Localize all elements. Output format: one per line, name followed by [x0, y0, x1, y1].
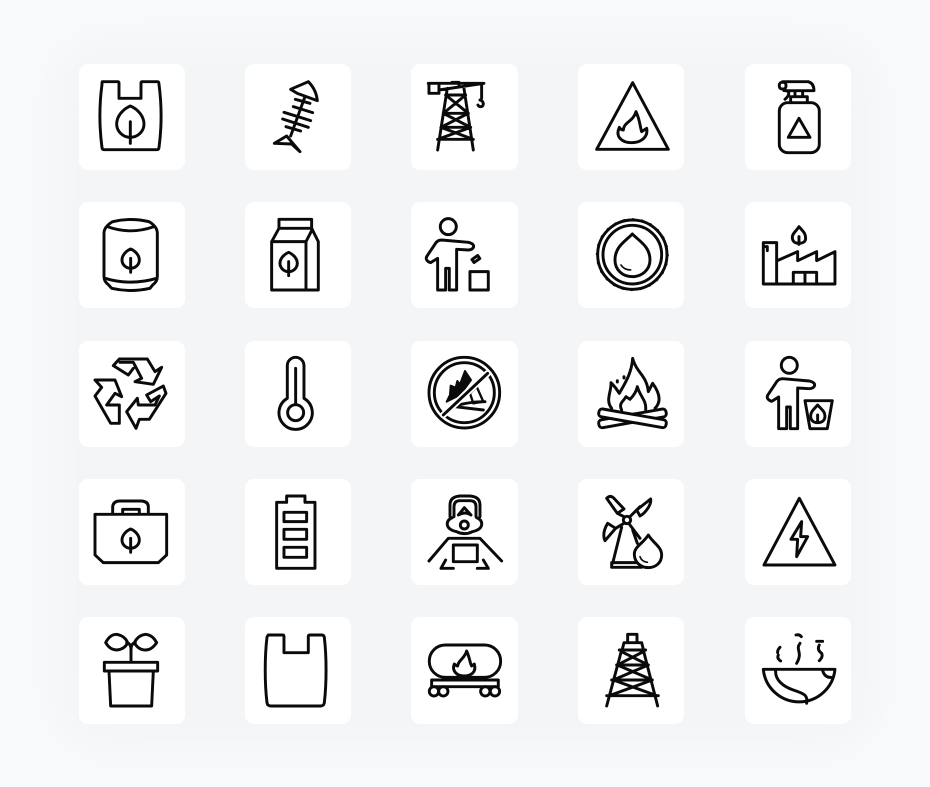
icon: recycle arrows: [79, 341, 185, 447]
icon: thermometer: [245, 341, 351, 447]
icon: fuel tank wagon: [411, 617, 518, 724]
icon: spray bottle: [745, 64, 851, 170]
icon: oil derrick: [578, 617, 684, 724]
icon: person using eco bin: [745, 341, 851, 447]
icon: windmill with drop: [578, 479, 684, 585]
icon: gas mask worker: [411, 479, 518, 585]
icon: battery: [245, 479, 351, 585]
icon: high voltage triangle: [745, 479, 851, 585]
icon: flammable warning triangle: [578, 64, 684, 170]
icon: plain plastic bag: [245, 617, 351, 724]
icon: fish bone: [245, 64, 351, 170]
icon: no fire sign: [411, 341, 518, 447]
icon: sprout in pot: [79, 617, 185, 724]
icon: eco tool bag: [79, 479, 185, 585]
icon: factory with flame: [745, 202, 851, 308]
icon: polluted earth bowl: [745, 617, 851, 724]
icon: leaf plastic bag: [79, 64, 185, 170]
icon: leaf can: [79, 202, 185, 308]
icon: campfire: [578, 341, 684, 447]
icon: oil drop badge: [578, 202, 684, 308]
icon: crane tower: [411, 64, 518, 170]
icon: milk carton: [245, 202, 351, 308]
icon: person littering: [411, 202, 518, 308]
